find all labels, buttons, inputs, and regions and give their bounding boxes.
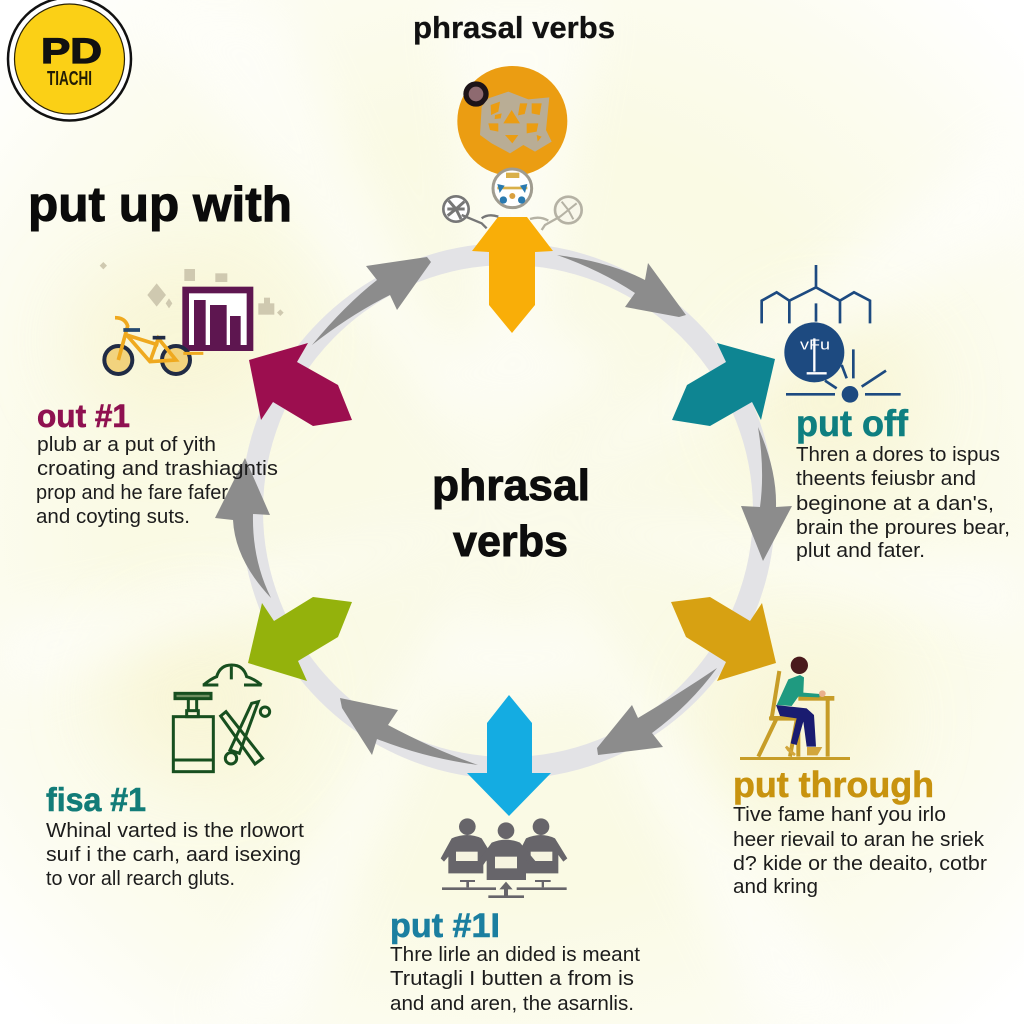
arrow: magenta <box>249 343 352 426</box>
gray arrow: top left <box>312 257 431 345</box>
section: put off: put off <box>796 403 909 444</box>
icon: person at desk <box>740 657 850 760</box>
section: fisa #1 <box>46 781 304 890</box>
top title: phrasal verbs <box>413 10 615 45</box>
icon: left wheel <box>443 196 498 228</box>
arrow: green <box>248 597 352 681</box>
section: put through: and kring <box>733 876 818 898</box>
section: put off: plut and fater. <box>796 540 925 562</box>
section: out #1: croating and trashiagntis <box>37 458 278 480</box>
section: out #1: and coyting suts. <box>36 506 190 528</box>
icon text: bulb label: vFu <box>800 337 830 353</box>
icon: bottle and tools <box>173 665 270 772</box>
icon: right person <box>516 818 567 873</box>
logo badge: PD <box>41 32 102 71</box>
icon: faint shapes <box>100 262 284 316</box>
section: put off: Thren a dores to ispus <box>796 444 1000 466</box>
section: put off: beginone at a dan's, <box>796 493 994 515</box>
logo badge: TIACHI <box>47 68 92 90</box>
icon: dark badge <box>463 81 489 107</box>
section: fisa #1: Whinal varted is the rlowort <box>46 820 304 842</box>
icon: right wheel <box>530 197 582 230</box>
section: put #1I: and and aren, the asarnlis. <box>390 993 634 1015</box>
heading: put up with: put up with <box>28 177 292 232</box>
section: put through: d? kide or the deaito, cotbr <box>733 853 987 875</box>
icon: three people <box>441 818 567 898</box>
section: put #1I: put #1I <box>390 907 500 945</box>
section: out #1: plub ar a put of yith <box>37 434 216 456</box>
arrow: gold <box>671 597 776 681</box>
gray arrow: top right <box>557 255 686 317</box>
cycle ring <box>252 254 764 768</box>
section: put through: heer rievail to aran he sriek <box>733 829 985 851</box>
icon: maze emblem <box>480 92 552 153</box>
section: put through: Tive fame hanf you irlo <box>733 804 946 826</box>
gray arrow: right <box>741 427 792 561</box>
icon: bicycle <box>104 318 203 374</box>
section: put through: put through <box>733 764 934 805</box>
icon: small wheel emblem <box>493 169 532 208</box>
icon: bicycle and bar chart <box>100 262 284 374</box>
center title: verbs <box>453 517 568 566</box>
icon: bar chart <box>182 287 253 351</box>
icon: center person <box>477 822 537 880</box>
section: put off <box>796 403 1010 562</box>
center title: phrasal <box>432 461 590 510</box>
gray arrow: bottom left <box>340 698 478 765</box>
section: put off: theents feiusbr and <box>796 468 976 490</box>
section: put #1I <box>390 907 640 1015</box>
center title <box>432 461 590 566</box>
gray arrow: left <box>215 458 271 598</box>
arrow: yellow top <box>472 217 553 333</box>
section: out #1: out #1 <box>37 398 130 434</box>
section: put through <box>733 764 987 898</box>
section: put #1I: Thre lirle an dided is meant <box>390 944 640 966</box>
arrow: blue <box>467 695 551 816</box>
logo badge <box>8 0 131 120</box>
section: fisa #1: fisa #1 <box>46 781 146 818</box>
section: put off: brain the proures bear, <box>796 517 1010 539</box>
icon: top orange emblem with bikes <box>443 66 582 230</box>
section: fisa #1: suıf i the carh, aard isexing <box>46 844 301 866</box>
section: out #1 <box>36 398 278 528</box>
section: out #1: prop and he fare fafer <box>36 482 228 504</box>
gray arrow: bottom right <box>597 668 717 755</box>
arrow: teal <box>672 343 775 426</box>
icon: teal molecule and lightbulb <box>762 265 901 403</box>
section: fisa #1: to vor all rearch gluts. <box>46 868 235 890</box>
section: put #1I: Trutagli I butten a from is <box>390 968 634 990</box>
icon: left person <box>441 818 495 873</box>
